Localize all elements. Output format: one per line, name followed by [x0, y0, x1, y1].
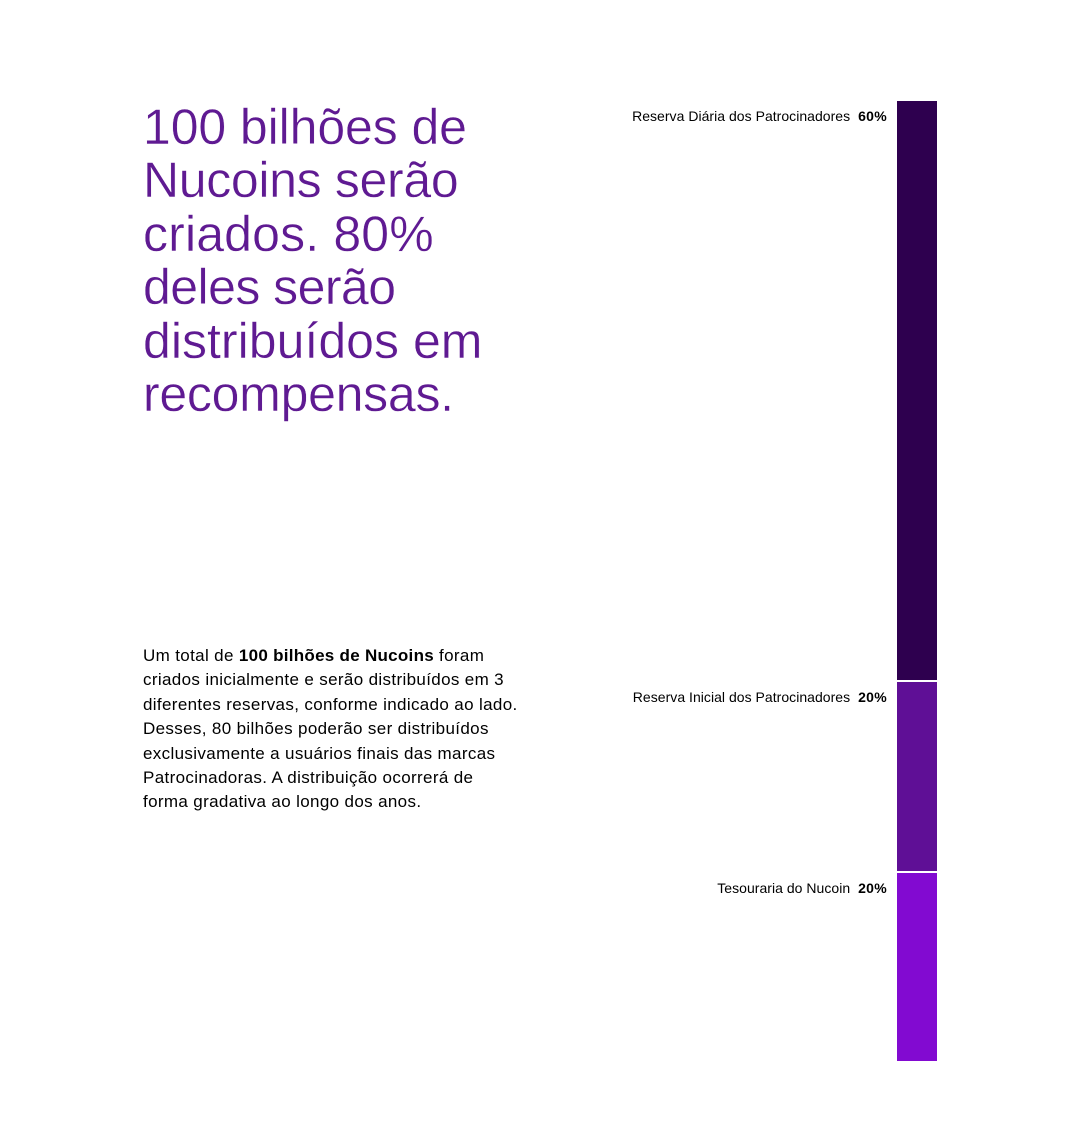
body text: criados inicialmente e serão distribuídos em 3: [143, 670, 504, 689]
body text: [143, 646, 518, 811]
title: recompensas.: [143, 366, 454, 422]
label: Reserva Diária dos Patrocinadores 60%: Reserva Diária dos Patrocinadores 60%: [632, 108, 887, 124]
title: deles serão: [143, 259, 395, 315]
bar segment: 60%: [897, 101, 937, 680]
body text: exclusivamente a usuários finais das marcas: [143, 744, 495, 763]
label: Reserva Inicial dos Patrocinadores 20%: Reserva Inicial dos Patrocinadores 20%: [633, 689, 887, 705]
body text: Desses, 80 bilhões poderão ser distribuídos: [143, 719, 489, 738]
title: 100 bilhões de: [143, 99, 467, 155]
body text: diferentes reservas, conforme indicado ao lado.: [143, 695, 518, 714]
bar segment: 20% initial reserve: [897, 682, 937, 871]
title: [143, 99, 482, 422]
title: criados. 80%: [143, 206, 434, 262]
body text: forma gradativa ao longo dos anos.: [143, 792, 421, 811]
body text: Um total de 100 bilhões de Nucoins foram: [143, 646, 484, 665]
bar segment: 20% treasury: [897, 873, 937, 1061]
label: Tesouraria do Nucoin 20%: Tesouraria do Nucoin 20%: [717, 880, 887, 896]
body text: Patrocinadoras. A distribuição ocorrerá de: [143, 768, 473, 787]
title: Nucoins serão: [143, 152, 458, 208]
title: distribuídos em: [143, 313, 482, 369]
